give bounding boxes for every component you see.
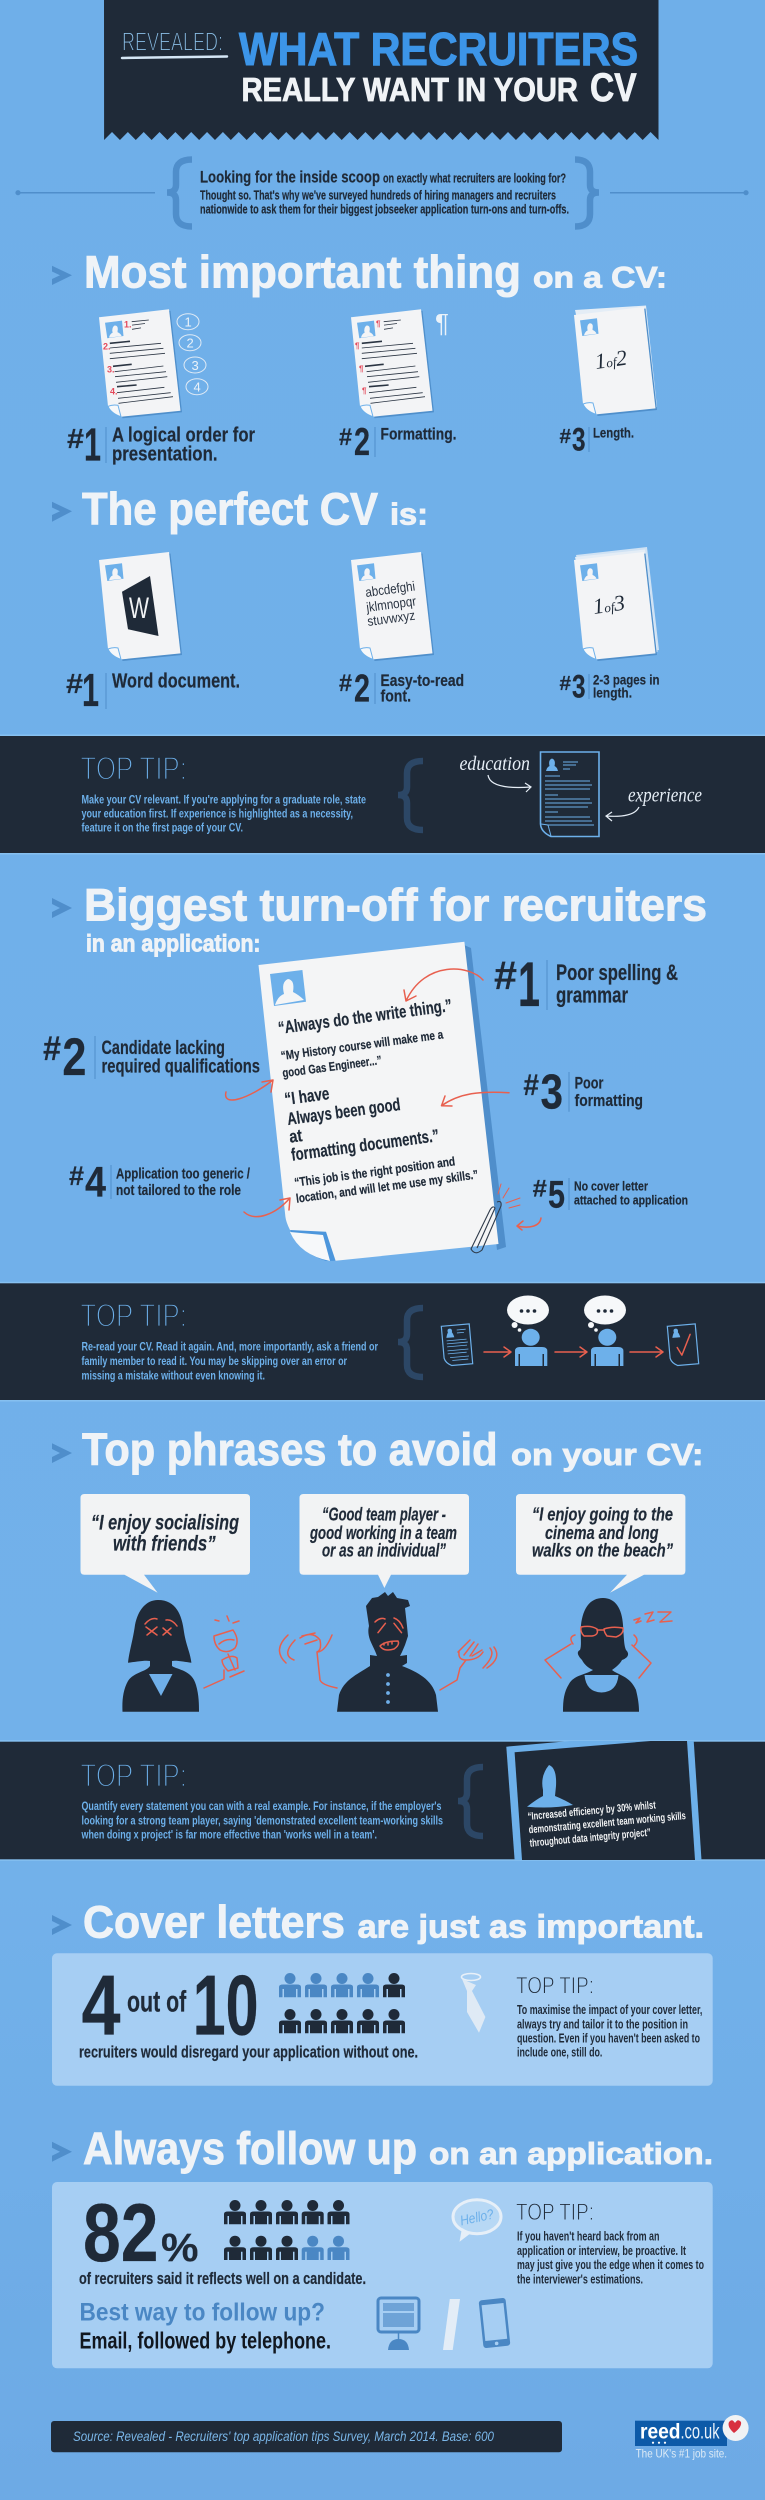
diagram: proofreading chain — [441, 1296, 699, 1366]
card: quantified statement example — [506, 1730, 702, 1860]
pictogram: ten people, eight highlighted — [224, 2200, 350, 2260]
rank 2: lacking qualifications: # — [43, 1030, 61, 1068]
illustration: CV with mistakes: formatting documents.” — [290, 1125, 440, 1165]
illustration: CV with mistakes: “Always do the write thing.” — [277, 995, 453, 1038]
speech bubble: team player: or as an individual” — [322, 1540, 447, 1561]
icon: CV with numbered order: 2 — [186, 336, 194, 350]
speech bubble: team player: “Good team player - — [322, 1504, 446, 1525]
icon: CV with numbered order — [99, 309, 208, 418]
stat: 4 out of 10: 10 — [193, 1958, 258, 2053]
logo: reed.co.uk — [635, 2415, 749, 2460]
rank 5: no cover letter: No cover letter — [574, 1179, 648, 1194]
arrows: mistake pointers — [226, 969, 541, 1230]
rank 2: formatting: # — [339, 424, 352, 451]
speech bubble: team player — [300, 1494, 469, 1588]
illustration: CV with mistakes: “My History course will make me a — [280, 1027, 445, 1063]
icon: easy to read font CV: abcdefghi — [364, 578, 416, 600]
icon: CV formatting: ¶ — [362, 386, 367, 395]
rank 1: word document — [66, 664, 240, 716]
rank 4: too generic: not tailored to the role — [116, 1182, 241, 1199]
illustration: CV with mistakes: “I have — [283, 1083, 331, 1109]
heading: always follow up: on an application. — [429, 2136, 713, 2171]
rank 3: length: # — [560, 426, 571, 448]
heading: top phrases to avoid — [52, 1424, 703, 1475]
stat: 4 out of 10 — [79, 1958, 418, 2061]
figure: waving man — [279, 1592, 497, 1712]
icon: easy to read font CV: stuvwxyz — [366, 608, 416, 629]
divider slash — [443, 2299, 460, 2350]
icon: computer — [378, 2298, 419, 2350]
panel: top tip 1: TOP TIP: — [80, 750, 187, 786]
rank 2: lacking qualifications — [43, 1028, 260, 1087]
logo: reed.co.uk: .co.uk — [680, 2420, 720, 2443]
panel: top tip 3: Quantify every statement you can with a real example. For instance, if the employer's — [82, 1799, 442, 1813]
rank 1: poor spelling: 1 — [518, 950, 540, 1020]
panel: top tip 3: TOP TIP: — [80, 1758, 187, 1794]
tip: follow up — [516, 2199, 704, 2286]
icon: CV with numbered order: 4 — [194, 380, 201, 394]
heading: biggest turn-off: Biggest turn-off for recruiters — [84, 880, 707, 931]
heading: most important thing: on a CV: — [533, 261, 667, 294]
icon: word document CV — [99, 552, 182, 661]
rank 1: a logical order: 1 — [84, 419, 101, 471]
heading: always follow up: Always follow up — [83, 2123, 417, 2174]
rank 2: lacking qualifications: Candidate lacking — [102, 1038, 225, 1059]
source note — [51, 2421, 562, 2452]
tip: cover letter: include one, still do. — [517, 2046, 602, 2060]
logo: reed.co.uk: The UK's #1 job site. — [636, 2446, 727, 2460]
rank 5: no cover letter: attached to application — [574, 1192, 688, 1207]
panel: top tip 2: Re-read your CV. Read it again. And, more importantly, ask a friend or — [82, 1340, 378, 1354]
panel: follow up stats — [52, 2182, 713, 2368]
icon: hello speech bubble — [453, 2200, 501, 2242]
panel: top tip 1: feature it on the first page of your CV. — [82, 821, 243, 835]
title banner: REALLY WANT IN YOUR — [242, 72, 578, 109]
rank 1: word document: # — [66, 668, 83, 699]
icon: three page CV: 1of3 — [591, 590, 627, 619]
rank 2: formatting: Formatting. — [380, 424, 456, 443]
heading: cover letters — [52, 1896, 704, 1947]
rank 1: poor spelling: Poor spelling & — [556, 960, 678, 985]
tip: follow up: TOP TIP: — [516, 2199, 594, 2226]
heading: top phrases to avoid: on your CV: — [511, 1437, 703, 1472]
intro paragraph — [15, 160, 749, 226]
rank 3: 2-3 pages: # — [560, 673, 571, 695]
rank 2: easy to read font: font. — [380, 687, 411, 706]
heading: the perfect CV: is: — [390, 496, 428, 531]
icon: CV formatting: ¶ — [435, 308, 449, 338]
icon: paperclip — [471, 1202, 501, 1253]
figure: woman with wine — [122, 1600, 244, 1712]
text: best way to follow up: Email, followed by telephone. — [80, 2327, 331, 2353]
icon: word document CV: W — [129, 592, 149, 625]
tip: follow up: the interviewer's estimations. — [517, 2272, 643, 2286]
icon: tie — [462, 1974, 485, 2033]
icon: hello speech bubble: Hello? — [459, 2206, 495, 2228]
rank 3: length: Length. — [593, 424, 634, 440]
rank 1: poor spelling — [494, 950, 678, 1020]
icon: three page CV — [574, 547, 659, 661]
rank 5: no cover letter: # — [533, 1176, 547, 1203]
stat: 4 out of 10: out of — [127, 1986, 187, 2019]
heading: top phrases to avoid: Top phrases to avoid — [82, 1424, 498, 1475]
illustration: CV with mistakes: at — [288, 1125, 304, 1147]
tip: follow up: application or interview, be proactive. It — [517, 2244, 687, 2258]
panel: top tip 1: your education first. If experience is highlighted as a necessity, — [82, 807, 353, 821]
panel: top tip 2 — [0, 1282, 765, 1402]
illustration: CV with mistakes — [258, 942, 506, 1261]
speech bubble: socialising: with friends” — [113, 1533, 216, 1556]
speech bubble: socialising: “I enjoy socialising — [91, 1511, 239, 1534]
stat: 82 percent: of recruiters said it reflects well on a candidate. — [79, 2269, 366, 2288]
speech bubble: socialising — [80, 1494, 250, 1593]
rank 1: a logical order: A logical order for — [112, 425, 255, 447]
heading: biggest turn-off — [52, 880, 707, 958]
icon: CV formatting: ¶ — [355, 341, 360, 350]
rank 1: a logical order: # — [67, 423, 84, 454]
stat: 82 percent: % — [161, 2226, 198, 2270]
rank 1: poor spelling: grammar — [556, 983, 628, 1008]
card: quantified statement example: throughout data integrity project” — [529, 1827, 651, 1850]
speech bubble: cinema and beach — [516, 1494, 685, 1593]
rank 4: too generic: 4 — [85, 1159, 106, 1207]
rank 1: a logical order — [67, 419, 255, 471]
rank 4: too generic: # — [69, 1161, 84, 1191]
rank 3: poor formatting: 3 — [540, 1065, 563, 1119]
panel: top tip 1 — [0, 734, 765, 854]
source note: Source: Revealed - Recruiters' top application tips Survey, March 2014. Base: 600 — [73, 2429, 494, 2444]
icon: two page CV — [574, 306, 657, 416]
rank 3: length — [560, 422, 634, 458]
tip: cover letter: always try and tailor it to the position in — [517, 2017, 688, 2031]
text: best way to follow up — [80, 2299, 331, 2353]
rank 3: 2-3 pages — [560, 668, 660, 704]
panel: top tip 3: when doing x project' is far more effective than 'works well in a team'. — [81, 1827, 377, 1841]
title banner: CV — [590, 66, 637, 110]
logo: reed.co.uk: reed — [640, 2420, 680, 2443]
icon: CV with numbered order: 1. — [124, 319, 132, 329]
icon: CV with education and experience: experience — [628, 785, 702, 807]
rank 3: length: 3 — [572, 422, 586, 458]
icon: CV with numbered order: 3 — [192, 358, 199, 373]
icon: CV formatting: ¶ — [359, 364, 364, 373]
rank 3: 2-3 pages: length. — [593, 685, 632, 701]
stat: 4 out of 10: recruiters would disregard your application without one. — [79, 2042, 418, 2061]
icon: telephone — [479, 2298, 510, 2348]
rank 1: a logical order: presentation. — [112, 444, 218, 466]
rank 3: poor formatting — [523, 1065, 643, 1119]
illustration: CV with mistakes: Always been good — [286, 1094, 402, 1129]
pictogram: ten people, four highlighted — [279, 1973, 405, 2033]
stat: 82 percent — [79, 2186, 366, 2288]
icon: easy to read font CV — [351, 552, 434, 661]
panel: top tip 3 — [0, 1730, 765, 1861]
icon: CV formatting — [351, 308, 449, 418]
rank 2: formatting: 2 — [354, 421, 370, 464]
speech bubble: cinema and beach: “I enjoy going to the — [532, 1504, 673, 1525]
icon: CV with numbered order: 3. — [107, 364, 115, 374]
intro paragraph: Thought so. That's why we've surveyed hundreds of hiring managers and recruiters — [200, 188, 556, 202]
rank 2: formatting — [339, 421, 456, 464]
heading: cover letters: are just as important. — [358, 1908, 704, 1944]
title banner: WHAT RECRUITERS — [239, 23, 638, 75]
intro paragraph: Looking for the inside scoop — [200, 169, 380, 187]
rank 3: 2-3 pages: 2-3 pages in — [593, 671, 660, 687]
title banner — [104, 0, 658, 140]
panel: top tip 1: Make your CV relevant. If you're applying for a graduate role, state — [82, 792, 366, 806]
rank 3: 2-3 pages: 3 — [572, 668, 586, 704]
rank 2: easy to read font: 2 — [354, 668, 370, 711]
rank 2: lacking qualifications: required qualifications — [102, 1057, 260, 1078]
card: quantified statement example: demonstrating excellent team working skills — [528, 1810, 686, 1836]
heading: biggest turn-off: in an application: — [86, 931, 260, 958]
tip: cover letter: TOP TIP: — [516, 1972, 594, 1999]
rank 4: too generic: Application too generic / — [116, 1165, 251, 1182]
heading: most important thing: Most important thing — [84, 246, 521, 297]
panel: top tip 2: TOP TIP: — [80, 1298, 187, 1334]
rank 2: easy to read font: Easy-to-read — [380, 671, 464, 690]
figure: bored woman — [545, 1598, 672, 1712]
title banner: REVEALED: — [122, 29, 223, 57]
icon: two page CV: 1of2 — [593, 345, 629, 374]
rank 5: no cover letter — [533, 1173, 688, 1216]
icon: easy to read font CV: jklmnopqr — [365, 593, 417, 615]
card: quantified statement example: “Increased efficiency by 30% whilst — [527, 1799, 657, 1823]
panel: top tip 2: missing a mistake without even knowing it. — [82, 1368, 265, 1382]
illustration: CV with mistakes: good Gas Engineer...” — [282, 1053, 383, 1080]
rank 3: poor formatting: formatting — [575, 1091, 643, 1110]
icon: CV with numbered order: 2. — [103, 341, 111, 351]
stat: 4 out of 10: 4 — [82, 1958, 120, 2053]
stat: 82 percent: 82 — [83, 2186, 158, 2279]
rank 2: easy to read font: # — [339, 670, 352, 697]
heading: always follow up — [52, 2123, 713, 2174]
panel: top tip 2: family member to read it. You may be skipping over an error or — [82, 1354, 347, 1368]
icon: CV with numbered order: 4. — [110, 386, 118, 396]
rank 1: word document: Word document. — [112, 670, 240, 692]
intro paragraph: on exactly what recruiters are looking for? — [383, 172, 566, 186]
rank 3: poor formatting: Poor — [575, 1073, 604, 1092]
illustration: CV with mistakes: location, and will let me use my skills.” — [295, 1168, 479, 1206]
icon: CV formatting: ¶ — [376, 319, 381, 328]
rank 3: poor formatting: # — [523, 1069, 539, 1102]
speech bubble: cinema and beach: cinema and long — [545, 1522, 658, 1543]
heading: cover letters: Cover letters — [83, 1896, 345, 1947]
icon: CV with education and experience — [460, 752, 702, 836]
icon: CV with numbered order: 1 — [184, 314, 192, 330]
heading: the perfect CV: The perfect CV — [82, 483, 378, 534]
icon: CV with education and experience: education — [460, 753, 530, 775]
speech bubble: team player: good working in a team — [309, 1522, 457, 1543]
rank 5: no cover letter: 5 — [548, 1173, 565, 1216]
intro paragraph: nationwide to ask them for their biggest jobseeker application turn-ons and turn-offs. — [200, 202, 569, 216]
rank 1: poor spelling: # — [494, 954, 517, 998]
speech bubble: cinema and beach: walks on the beach” — [532, 1540, 674, 1561]
rank 1: word document: 1 — [82, 664, 99, 716]
illustration: CV with mistakes: “This job is the right position and — [294, 1154, 456, 1190]
tip: cover letter — [516, 1972, 702, 2060]
rank 2: easy to read font — [339, 668, 464, 711]
panel: cover letters stats — [52, 1953, 713, 2086]
tip: follow up: If you haven't heard back from an — [517, 2230, 660, 2244]
panel: top tip 3: looking for a strong team player, saying 'demonstrated excellent team-working skills — [82, 1813, 443, 1827]
rank 2: lacking qualifications: 2 — [62, 1028, 86, 1087]
text: best way to follow up: Best way to follow up? — [80, 2299, 325, 2327]
rank 4: too generic — [69, 1159, 251, 1207]
